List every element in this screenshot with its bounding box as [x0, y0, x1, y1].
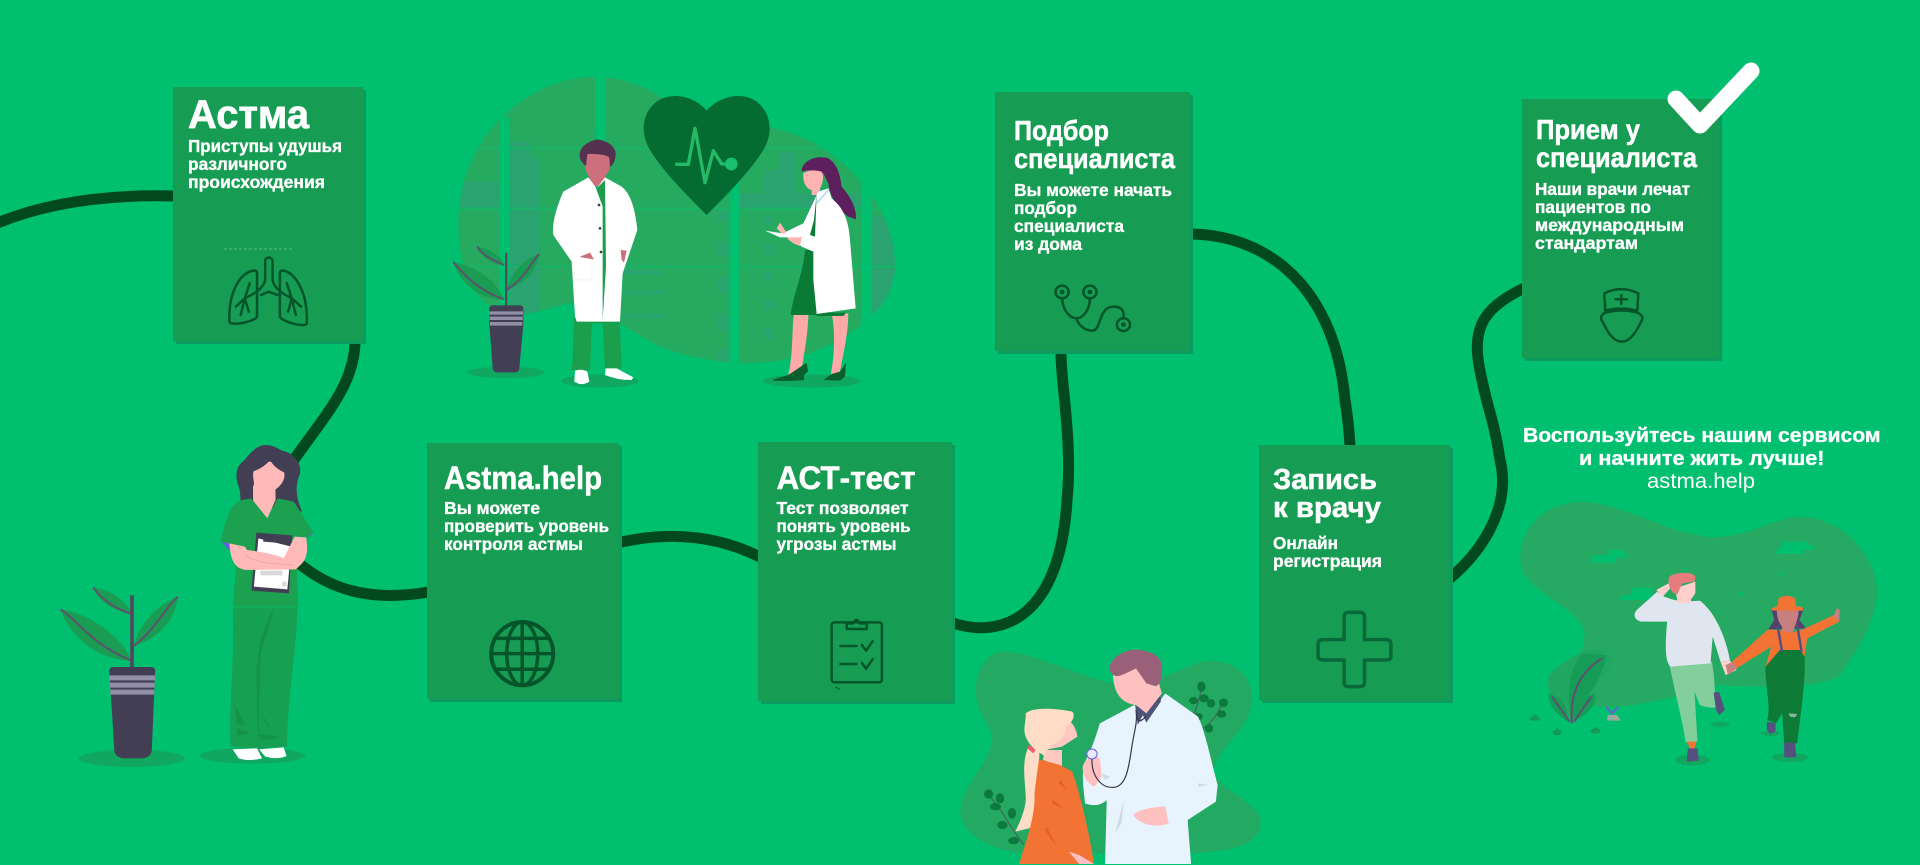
description	[776, 498, 911, 554]
description: контроля астмы	[444, 534, 583, 554]
bush and grass	[1530, 650, 1621, 735]
icon: stethoscope	[1056, 286, 1130, 331]
male doctor	[553, 139, 639, 388]
call to action	[1523, 424, 1880, 493]
icon: medical cross	[1318, 612, 1391, 687]
illustration: doctors with heart	[453, 67, 895, 388]
icon: heart with pulse	[644, 96, 770, 215]
heading: Подбор	[1014, 115, 1109, 146]
blob	[1520, 502, 1877, 707]
leaves	[984, 681, 1228, 845]
description	[444, 498, 609, 554]
panel: Astma.help	[427, 443, 622, 702]
child	[1015, 709, 1094, 864]
window blob	[458, 67, 895, 367]
description: угрозы астмы	[776, 534, 896, 554]
description: проверить уровень	[444, 516, 609, 536]
blob	[960, 652, 1261, 853]
heading: Astma.help	[444, 460, 602, 496]
call to action: Воспользуйтесь нашим сервисом	[1523, 424, 1880, 447]
nurse	[199, 445, 314, 764]
description: Наши врачи лечат	[1535, 179, 1690, 199]
panel: Запись к врачу	[1259, 445, 1453, 703]
description: Вы можете начать	[1014, 180, 1172, 200]
heading: Астма	[188, 93, 310, 137]
call to action: и начните жить лучше!	[1579, 447, 1824, 470]
heading: Запись	[1273, 464, 1377, 496]
icon: doctor with cap	[1601, 289, 1642, 342]
illustration: doctor with child	[960, 650, 1261, 864]
description	[188, 136, 342, 192]
doctor	[1083, 650, 1218, 864]
heading: специалиста	[1536, 142, 1698, 173]
description: Тест позволяет	[776, 498, 909, 518]
description	[1273, 533, 1382, 571]
description: Онлайн	[1273, 533, 1338, 553]
description: пациентов по	[1535, 197, 1651, 217]
plant in pot	[60, 587, 185, 767]
heading: Прием у	[1536, 114, 1641, 145]
description: стандартам	[1535, 233, 1638, 253]
description	[1014, 180, 1172, 254]
panel: Прием у специалиста	[1522, 99, 1722, 361]
description: международным	[1535, 215, 1684, 235]
icon: check mark	[1676, 71, 1751, 125]
description: из дома	[1014, 234, 1082, 254]
heading: к врачу	[1273, 492, 1381, 524]
icon: lungs	[224, 249, 307, 325]
description: Приступы удушья	[188, 136, 342, 156]
heading: АСТ-тест	[776, 460, 916, 496]
icon: clipboard checklist	[832, 620, 882, 689]
connecting path	[0, 196, 1524, 628]
panel: Астма	[173, 87, 366, 344]
description: понять уровень	[776, 516, 911, 536]
man	[1635, 573, 1737, 765]
illustration: running couple	[1520, 502, 1877, 765]
description: Вы можете	[444, 498, 540, 518]
heading	[1273, 464, 1381, 524]
description: регистрация	[1273, 551, 1382, 571]
heading	[1014, 115, 1176, 174]
description: происхождения	[188, 172, 325, 192]
icon: globe	[491, 622, 553, 685]
description: специалиста	[1014, 216, 1124, 236]
call to action: astma.help	[1647, 470, 1755, 493]
description: подбор	[1014, 198, 1077, 218]
panel: АСТ-тест	[758, 442, 955, 704]
heading: специалиста	[1014, 143, 1176, 174]
panel: Подбор специалиста	[995, 92, 1193, 354]
heading	[1536, 114, 1698, 173]
illustration: nurse and plant	[60, 445, 314, 767]
female doctor	[763, 157, 860, 388]
description: различного	[188, 154, 287, 174]
description	[1535, 179, 1690, 253]
woman	[1726, 596, 1840, 762]
plant in pot	[453, 247, 545, 378]
